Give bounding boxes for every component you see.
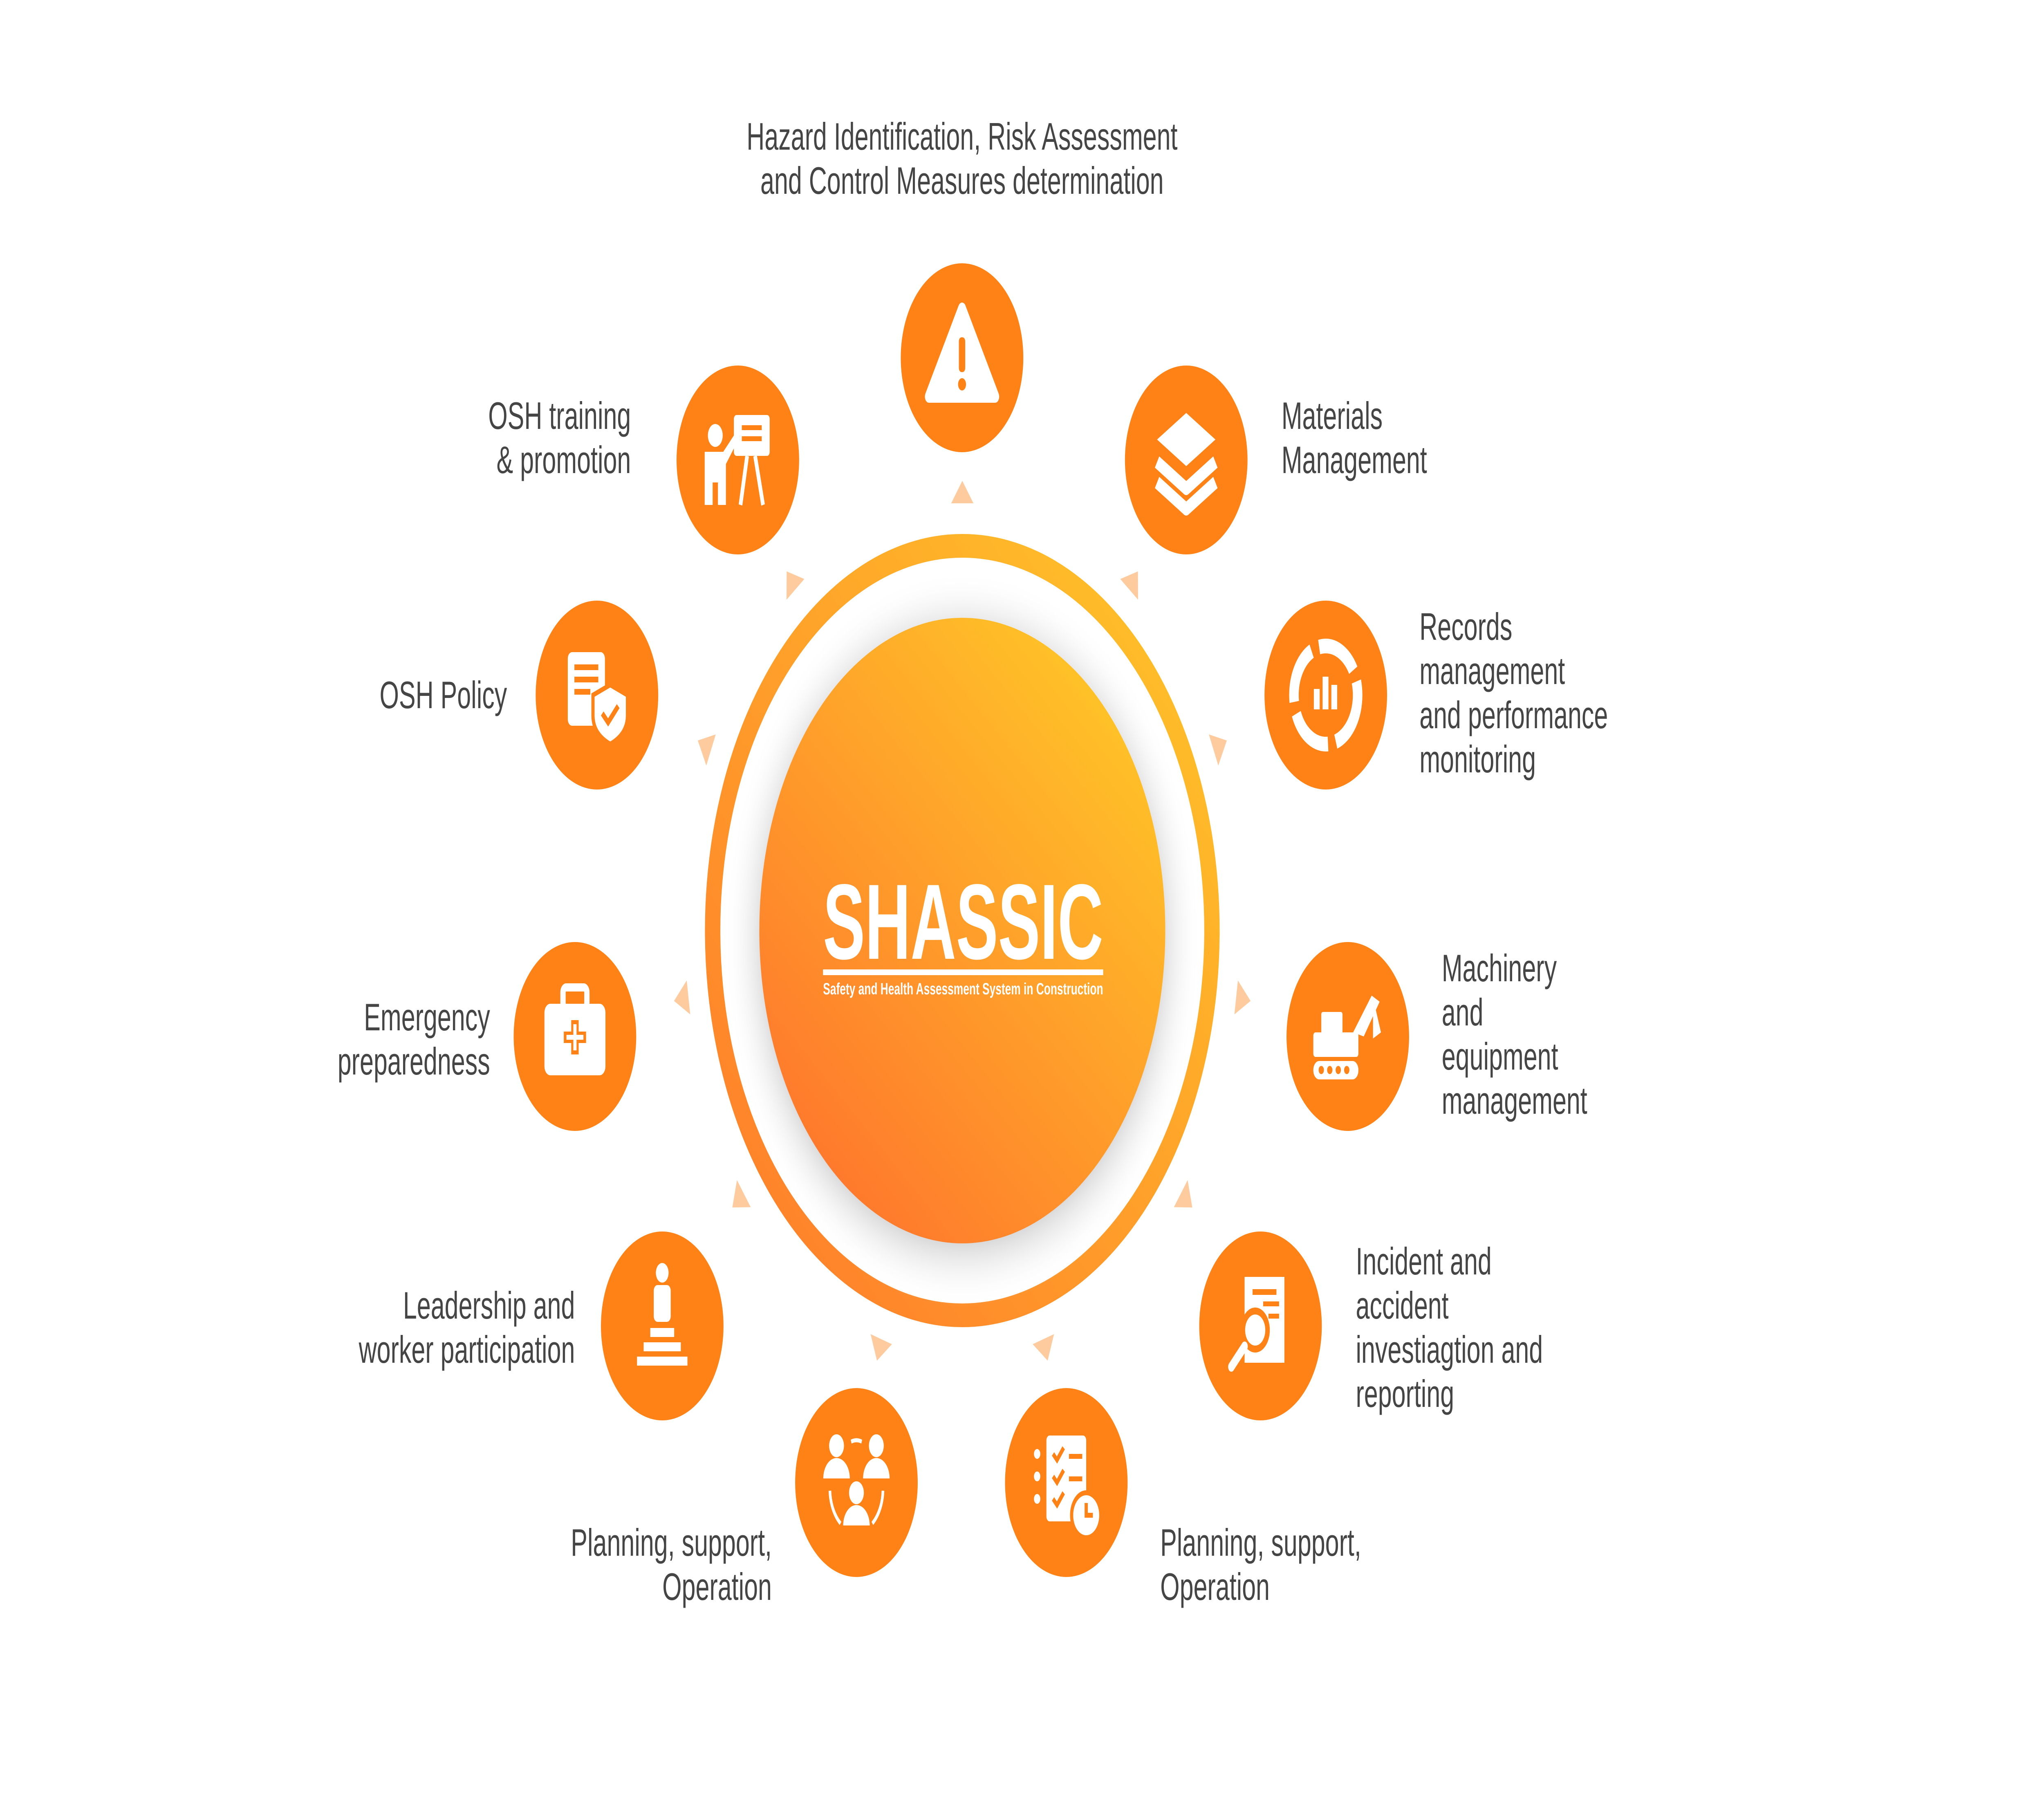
icon: first aid kit [513, 942, 636, 1131]
label: records management: and performance [1419, 693, 1608, 736]
label: planning right: Planning, support, [1160, 1521, 1361, 1564]
icon: records dashboard [1264, 601, 1387, 790]
label: hazard identification [746, 115, 1177, 202]
label: hazard identification: Hazard Identification, Risk Assessment [746, 115, 1177, 158]
icon: hazard warning [901, 263, 1023, 452]
label: records management: monitoring [1419, 738, 1536, 781]
label: emergency: Emergency [364, 996, 490, 1039]
label: OSH training [488, 394, 631, 481]
label: records management [1419, 605, 1608, 781]
label: planning left [571, 1521, 772, 1608]
icon: training presenter [677, 366, 799, 554]
icon: policy shield [536, 601, 658, 790]
label: leadership: Leadership and [403, 1284, 575, 1327]
label: leadership [359, 1284, 575, 1371]
label: machinery: management [1442, 1079, 1587, 1122]
label: machinery: and [1442, 991, 1484, 1034]
label: incident: Incident and [1356, 1240, 1492, 1283]
title: SHASSIC: SHASSIC [823, 862, 1103, 982]
central hub [713, 546, 1212, 1315]
label: materials management [1282, 394, 1427, 481]
label: planning right: Operation [1160, 1565, 1270, 1608]
label: machinery: Machinery [1442, 947, 1557, 989]
label: materials management: Materials [1282, 394, 1383, 437]
label: incident: investiagtion and [1356, 1328, 1543, 1371]
icon: leadership podium [601, 1231, 724, 1420]
decorative triangles [672, 481, 1252, 1366]
label: emergency [338, 996, 490, 1083]
label: planning left: Operation [662, 1565, 772, 1608]
icon: materials layers [1125, 366, 1248, 554]
label: hazard identification: and Control Measures determination [760, 159, 1164, 202]
icon: excavator [1286, 942, 1409, 1131]
label: incident [1356, 1240, 1543, 1415]
label: machinery: equipment [1442, 1035, 1558, 1078]
icon: checklist [1005, 1388, 1127, 1577]
label: OSH policy: OSH Policy [379, 673, 507, 716]
label: OSH training: & promotion [497, 438, 631, 481]
label: records management: Records [1419, 605, 1512, 648]
label: machinery [1442, 947, 1587, 1122]
label: planning right [1160, 1521, 1361, 1608]
icon: team [795, 1388, 918, 1577]
label: emergency: preparedness [338, 1040, 490, 1083]
label: planning left: Planning, support, [571, 1521, 772, 1564]
label: records management: management [1419, 649, 1565, 692]
icon: incident report [1199, 1231, 1322, 1420]
label: OSH training: OSH training [488, 394, 631, 437]
label: leadership: worker participation [359, 1328, 575, 1371]
label: incident: accident [1356, 1284, 1449, 1327]
subtitle: Safety and Health Assessment System in Construction [823, 980, 1103, 998]
label: materials management: Management [1282, 438, 1427, 481]
label: incident: reporting [1356, 1372, 1454, 1415]
